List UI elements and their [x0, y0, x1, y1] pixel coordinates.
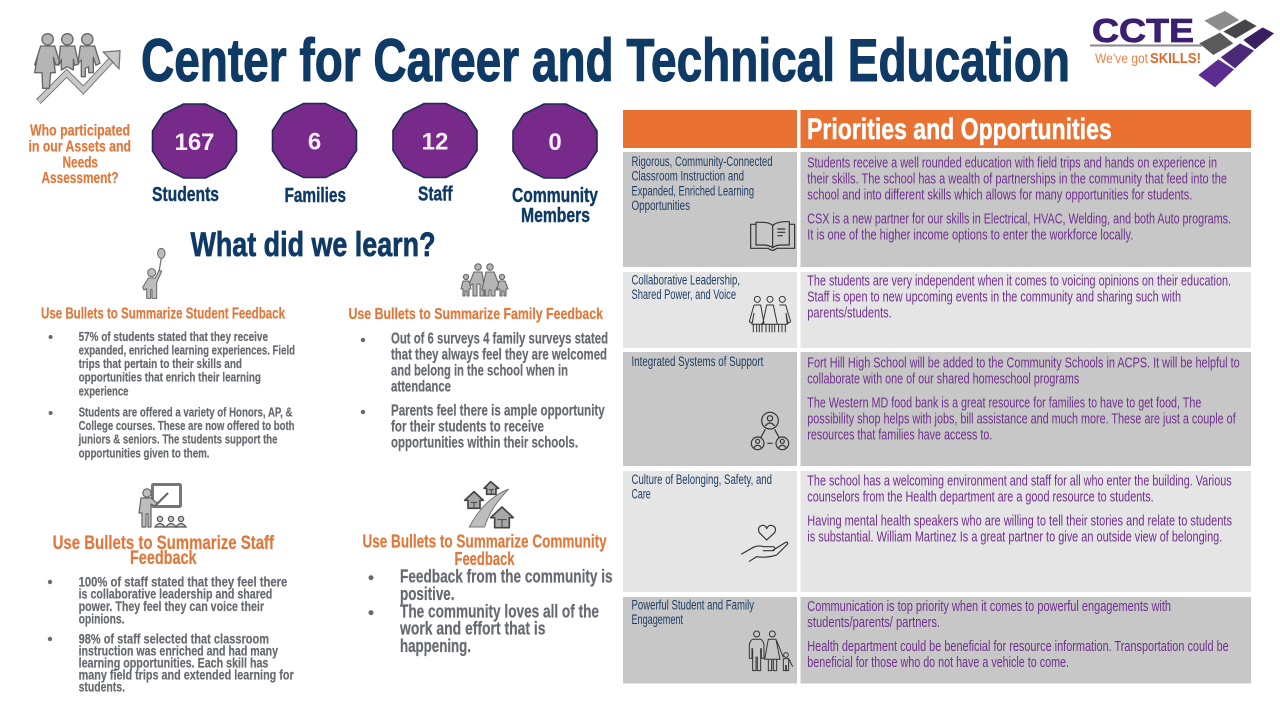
- bullets: family feedback: opportunities within their schools.: [391, 434, 578, 451]
- row: collaborative leadership: Shared Power, and Voice: [632, 287, 736, 302]
- icon: people with rising arrow: [35, 34, 120, 102]
- stat: students: Students: [152, 184, 219, 206]
- logo: CCTE: CCTE: [1092, 12, 1194, 49]
- row: family engagement: Engagement: [632, 612, 683, 627]
- bullets: staff feedback: learning opportunities. Each skill has: [79, 655, 269, 671]
- stat: community members: [512, 104, 599, 227]
- icon: hand holding heart: [742, 525, 788, 561]
- panel: staff feedback: [48, 533, 294, 695]
- row: collaborative leadership: [623, 272, 1251, 348]
- bullets: staff feedback: opinions.: [79, 610, 124, 626]
- row: family engagement: Powerful Student and Family: [632, 597, 754, 612]
- row: rigorous instruction: Rigorous, Community-Connected: [632, 154, 772, 169]
- row: integrated systems: [623, 352, 1251, 466]
- stat: families: Families: [284, 185, 346, 207]
- panel: community feedback: [362, 532, 613, 656]
- stat: staff: 12: [422, 128, 448, 156]
- question: who participated: [28, 122, 131, 187]
- bullets: community feedback: positive.: [400, 583, 454, 604]
- bullets: student feedback: Students are offered a variety of Honors, AP, &: [79, 405, 292, 420]
- question: who participated: Assessment?: [42, 170, 118, 187]
- heading: staff feedback: Use Bullets to Summarize Staff: [53, 533, 275, 554]
- bullets: student feedback: opportunities that enrich their learning: [79, 370, 261, 385]
- row: rigorous instruction: Classroom Instruction and: [632, 169, 744, 184]
- row: family engagement: students/parents/ partners.: [807, 614, 940, 631]
- bullets: student feedback: experience: [79, 383, 128, 398]
- row: family engagement: [623, 597, 1251, 684]
- bullets: student feedback: trips that pertain to their skills and: [79, 356, 242, 371]
- bullets: staff feedback: 98% of staff selected that classroom: [79, 630, 269, 646]
- bullets: staff feedback: instruction was enriched and had many: [79, 642, 278, 658]
- heading: family feedback: Use Bullets to Summarize Family Feedback: [348, 306, 603, 323]
- bullets: family feedback: for their students to receive: [391, 418, 544, 435]
- stat: families: 6: [308, 128, 321, 156]
- bullets: staff feedback: is collaborative leadership and shared: [79, 586, 272, 602]
- icon: student with balloon: [143, 248, 165, 298]
- table header: Priorities and Opportunities: [807, 113, 1112, 146]
- icon: family: [461, 264, 508, 296]
- icon: teacher at board: [139, 484, 186, 527]
- logo: CCTE: [1090, 11, 1274, 87]
- stat: students: [152, 104, 236, 206]
- bullets: student feedback: [49, 329, 295, 460]
- bullets: student feedback: opportunities given to them.: [79, 445, 209, 460]
- row: rigorous instruction: Opportunities: [632, 198, 690, 213]
- stat: community members: Members: [521, 205, 590, 227]
- logo: CCTE: We've got: [1095, 50, 1148, 66]
- bullets: family feedback: that they always feel they are welcomed: [391, 346, 607, 363]
- stat: community members: 0: [548, 129, 562, 156]
- row: culture of belonging: Care: [632, 487, 651, 502]
- row: collaborative leadership: parents/students.: [807, 305, 892, 322]
- table header: [623, 110, 1251, 148]
- bullets: student feedback: expanded, enriched learning experiences. Field: [79, 342, 295, 357]
- bullets: staff feedback: many field trips and extended learning for: [79, 667, 294, 683]
- row: integrated systems: resources that families have access to.: [807, 426, 992, 443]
- row: rigorous instruction: Expanded, Enriched Learning: [632, 183, 754, 198]
- icon: parents and child: [749, 631, 793, 671]
- heading: staff feedback: [53, 533, 275, 569]
- bullets: family feedback: Out of 6 surveys 4 family surveys stated: [391, 330, 608, 347]
- row: collaborative leadership: Collaborative Leadership,: [632, 272, 740, 287]
- stat: families: [272, 104, 356, 207]
- icon: three people: [749, 296, 791, 332]
- stat: staff: Staff: [418, 184, 453, 206]
- heading: community feedback: Use Bullets to Summarize Community: [362, 532, 607, 552]
- bullets: community feedback: work and effort that is: [399, 618, 546, 639]
- icon: open book: [751, 222, 795, 250]
- logo: CCTE: SKILLS!: [1150, 50, 1201, 67]
- row: rigorous instruction: [623, 152, 1251, 267]
- stat: community members: Community: [512, 185, 599, 207]
- table: priorities and opportunities: [623, 110, 1251, 684]
- heading: community feedback: [362, 532, 607, 569]
- row: rigorous instruction: It is one of the higher income options to enter the workforce locally.: [807, 226, 1133, 243]
- row: integrated systems: collaborate with one of our shared homeschool programs: [807, 370, 1079, 387]
- panel: family feedback: [348, 306, 608, 451]
- heading: student feedback: Use Bullets to Summarize Student Feedback: [41, 306, 285, 322]
- heading: what did we learn: What did we learn?: [190, 226, 436, 264]
- bullets: family feedback: attendance: [391, 378, 451, 395]
- row: integrated systems: Integrated Systems of Support: [632, 354, 763, 369]
- bullets: community feedback: happening.: [400, 635, 471, 656]
- heading: staff feedback: Feedback: [130, 548, 197, 569]
- bullets: student feedback: 57% of students stated that they receive: [79, 329, 268, 344]
- bullets: community feedback: Feedback from the community is: [400, 565, 613, 586]
- icon: connected people: [751, 412, 789, 450]
- bullets: student feedback: College courses. These are now offered to both: [79, 418, 295, 433]
- heading: community feedback: Feedback: [454, 549, 515, 569]
- bullets: staff feedback: 100% of staff stated that they feel there: [79, 574, 287, 590]
- bullets: staff feedback: [48, 574, 294, 695]
- row: culture of belonging: counselors from the Health department are a good resource to students.: [807, 489, 1154, 506]
- row: culture of belonging: Culture of Belonging, Safety, and: [632, 472, 772, 487]
- question: who participated: Who participated: [30, 122, 130, 140]
- stat: students: 167: [174, 129, 215, 156]
- stat: staff: [393, 104, 477, 206]
- bullets: student feedback: juniors & seniors. The students support the: [78, 432, 277, 447]
- bullets: community feedback: The community loves all of the: [400, 600, 599, 621]
- question: who participated: Needs: [62, 154, 98, 172]
- question: who participated: in our Assets and: [28, 138, 131, 156]
- bullets: family feedback: Parents feel there is ample opportunity: [391, 402, 605, 419]
- bullets: staff feedback: power. They feel they can voice their: [79, 598, 264, 614]
- row: culture of belonging: [623, 471, 1251, 592]
- bullets: community feedback: [368, 565, 613, 656]
- bullets: staff feedback: students.: [79, 679, 125, 695]
- bullets: family feedback: [361, 330, 608, 451]
- panel: student feedback: [41, 306, 295, 460]
- icon: houses and road: [465, 482, 513, 528]
- bullets: family feedback: and belong in the school when in: [391, 362, 568, 379]
- row: family engagement: beneficial for those who do not have a vehicle to come.: [807, 654, 1069, 671]
